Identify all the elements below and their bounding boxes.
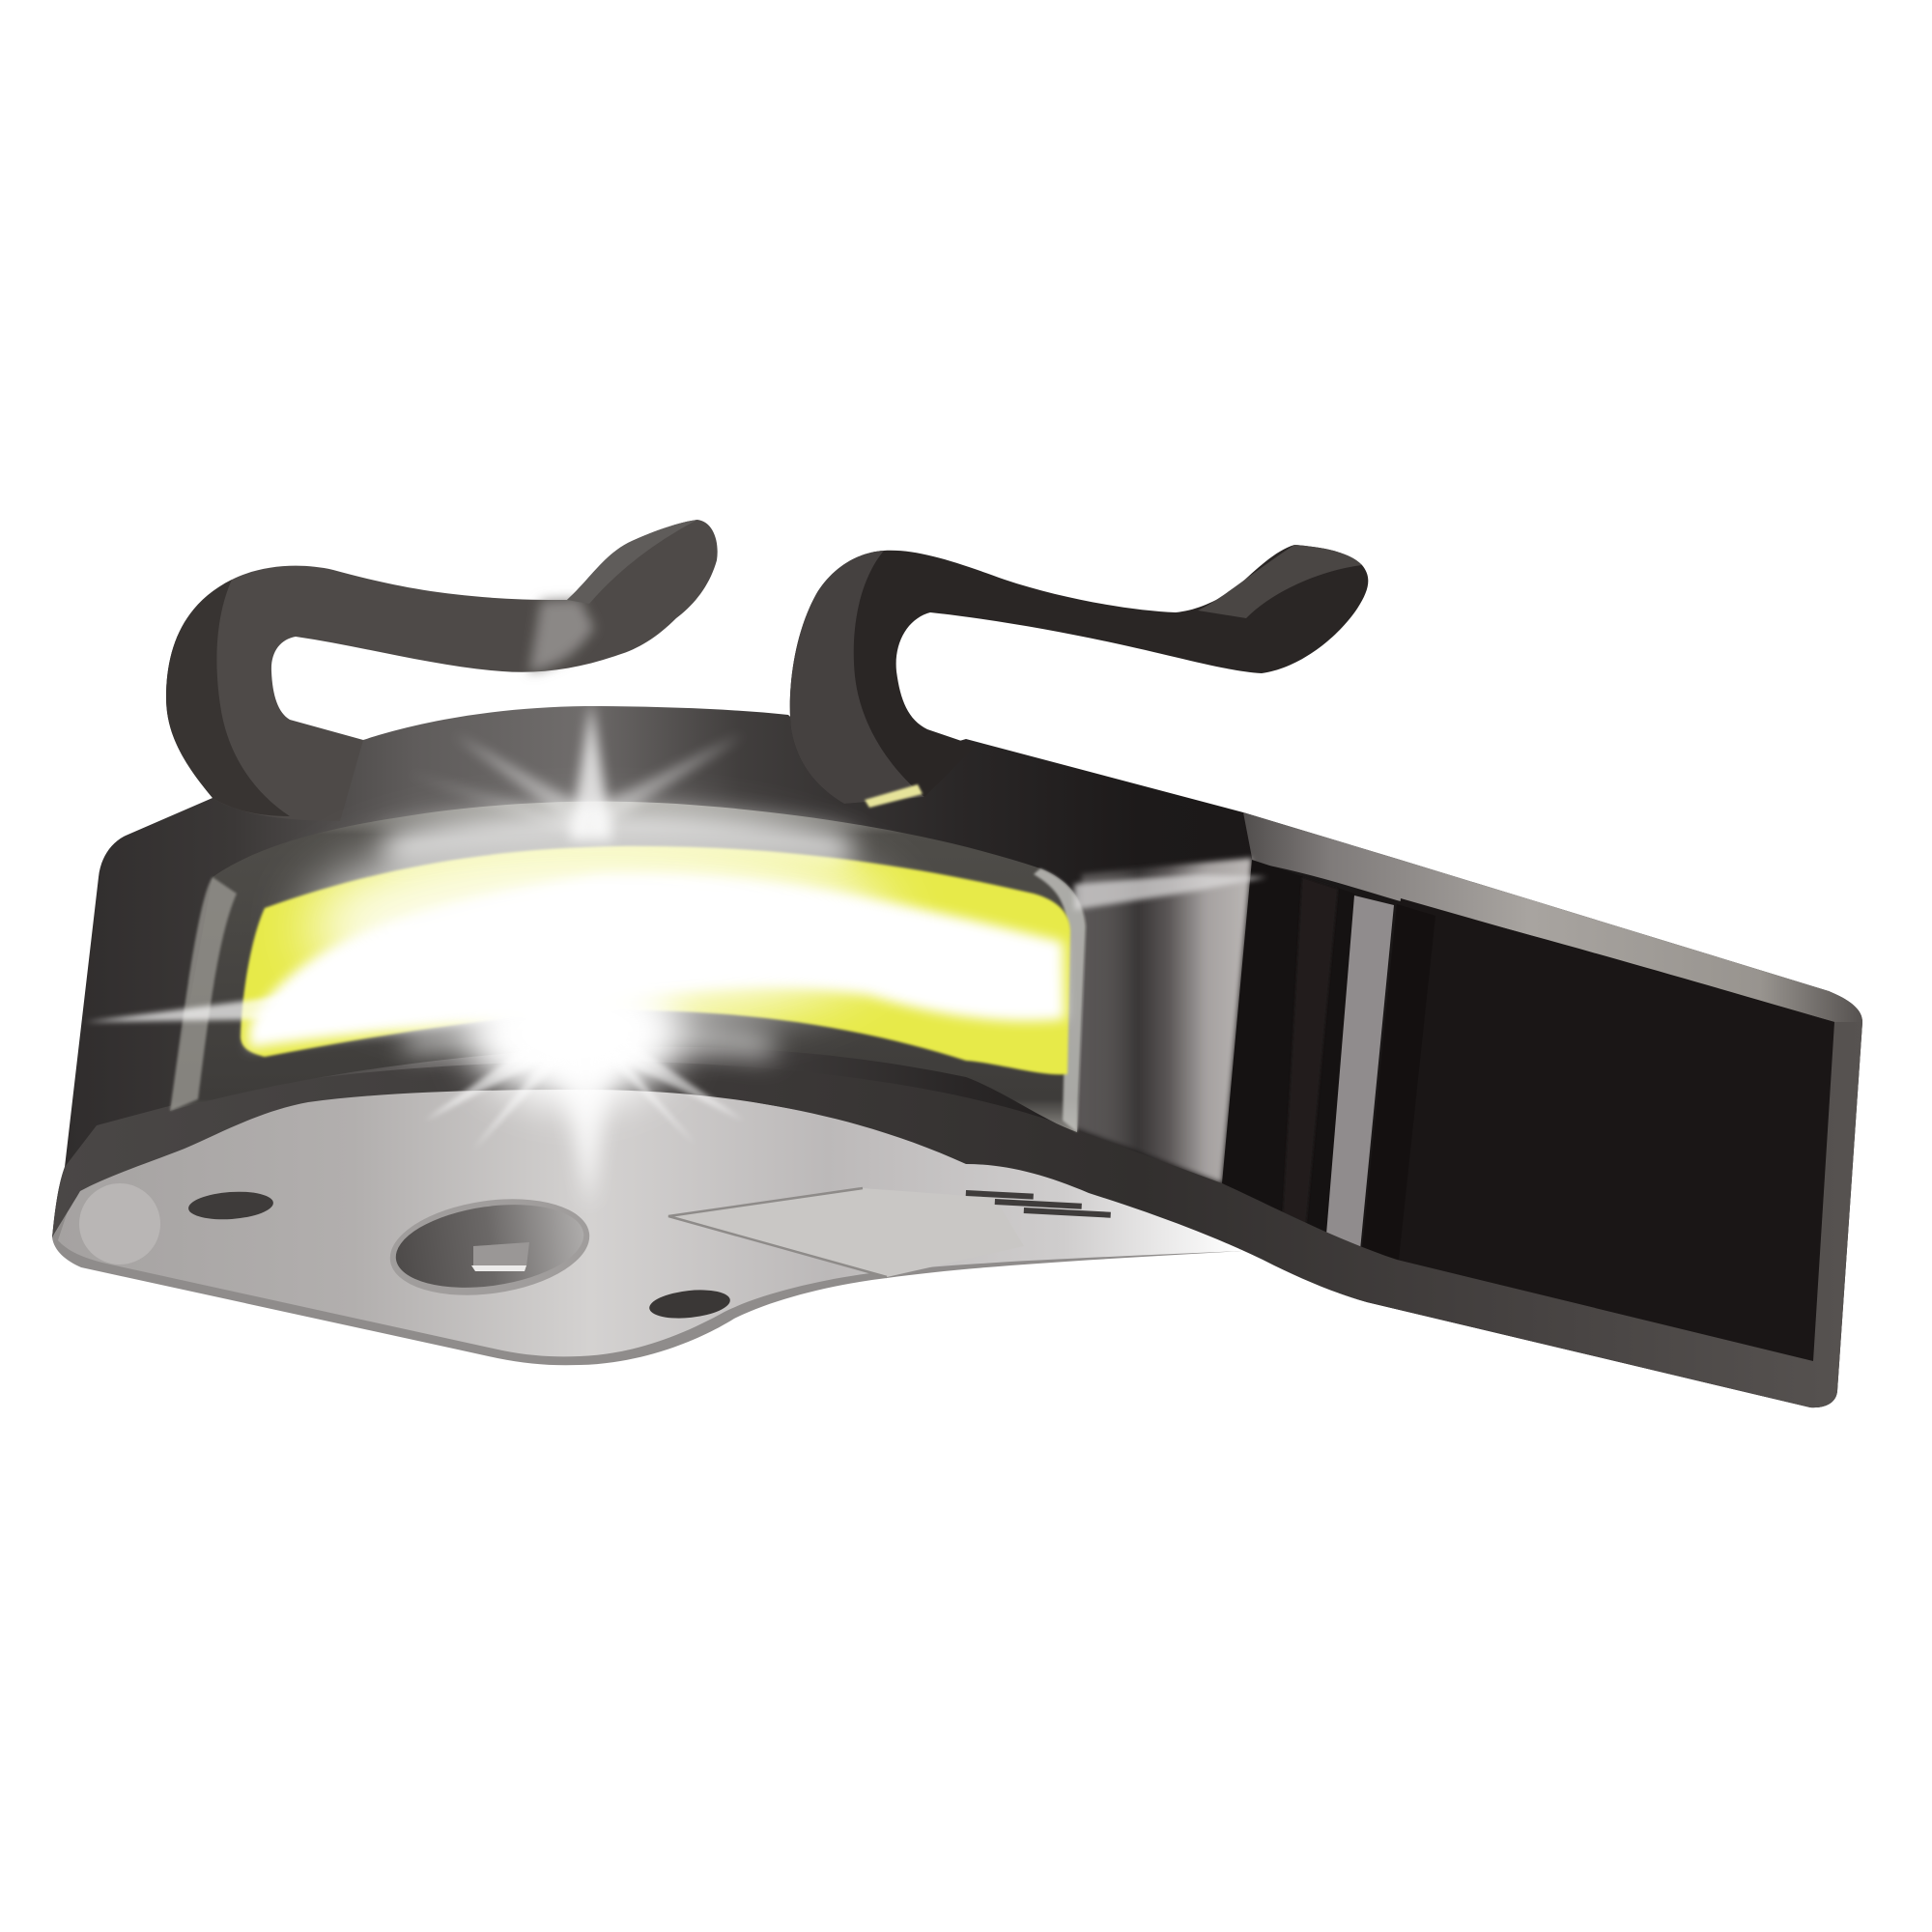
vertical highlight band 2	[1326, 895, 1394, 1250]
lens left edge	[170, 877, 237, 1111]
top bevel strip	[1243, 812, 1862, 1022]
LED strip: white core	[249, 873, 1065, 1048]
light flare: right ray	[1074, 874, 1267, 910]
dark end panel	[1372, 898, 1834, 1361]
light flare: lower star	[425, 1014, 744, 1208]
battery door	[668, 1188, 1024, 1277]
dark column	[1222, 860, 1354, 1235]
reflected LED glint	[865, 784, 923, 808]
lens right edge	[1034, 868, 1086, 1132]
center socket	[384, 1187, 596, 1307]
lens frame	[170, 802, 1086, 1132]
clip: left	[166, 520, 718, 821]
main housing	[52, 706, 1862, 1407]
screw hole right	[648, 1287, 731, 1321]
corner disc	[79, 1183, 160, 1264]
LED strip: yellow	[241, 846, 1070, 1074]
glow over housing	[309, 829, 889, 1106]
lower rim	[52, 1022, 1862, 1407]
clip: right	[790, 545, 1368, 808]
light flare: upper star	[406, 700, 744, 840]
vents	[966, 1190, 1111, 1218]
light flare: left ray	[85, 995, 290, 1022]
screw hole left	[187, 1189, 274, 1222]
bottom plate	[52, 1072, 1241, 1365]
vertical highlight band 1	[1067, 858, 1252, 1183]
